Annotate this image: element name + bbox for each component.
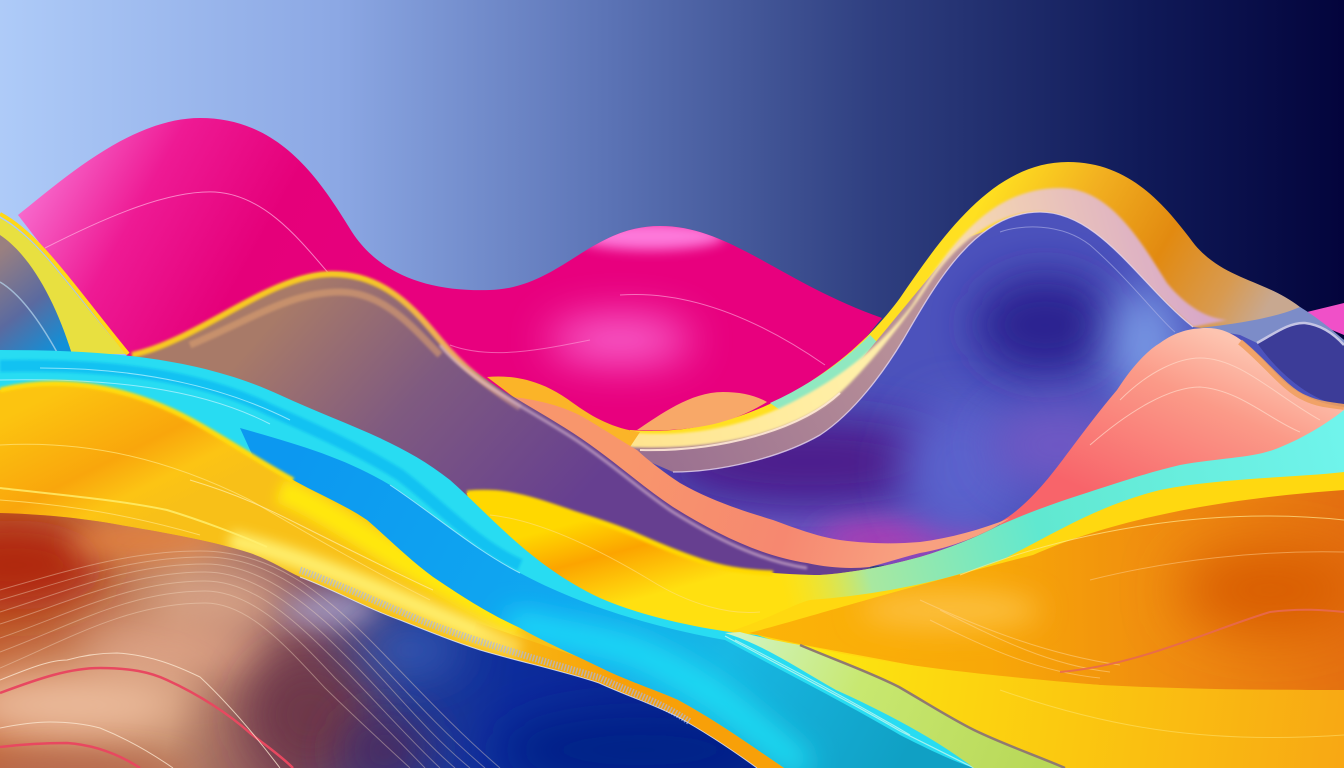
front yellow-orange wave: [0, 383, 790, 768]
mint band on the right: [780, 410, 1344, 620]
orange layer above ribbon: [487, 376, 640, 447]
cyan-blue flowing band: [0, 350, 1065, 768]
far-right magenta sliver: [1307, 303, 1344, 335]
magenta back wave: [18, 118, 882, 440]
bright yellow lower-right ribbon: [800, 645, 1344, 768]
salmon hill: [1000, 328, 1344, 560]
blue-purple interior: [652, 212, 1340, 566]
front earth-to-blue wave: [0, 513, 780, 768]
top-left corner wave: [0, 214, 128, 354]
left yellow-orange wave: [467, 492, 1000, 700]
small orange hill: [637, 392, 767, 430]
salmon ribbon: [513, 397, 1010, 570]
right yellow and orange wave: [749, 472, 1344, 690]
right glass wave with blue interior: [600, 162, 1344, 580]
brown-purple wave: [132, 272, 870, 720]
translucent right window: [1200, 307, 1344, 345]
